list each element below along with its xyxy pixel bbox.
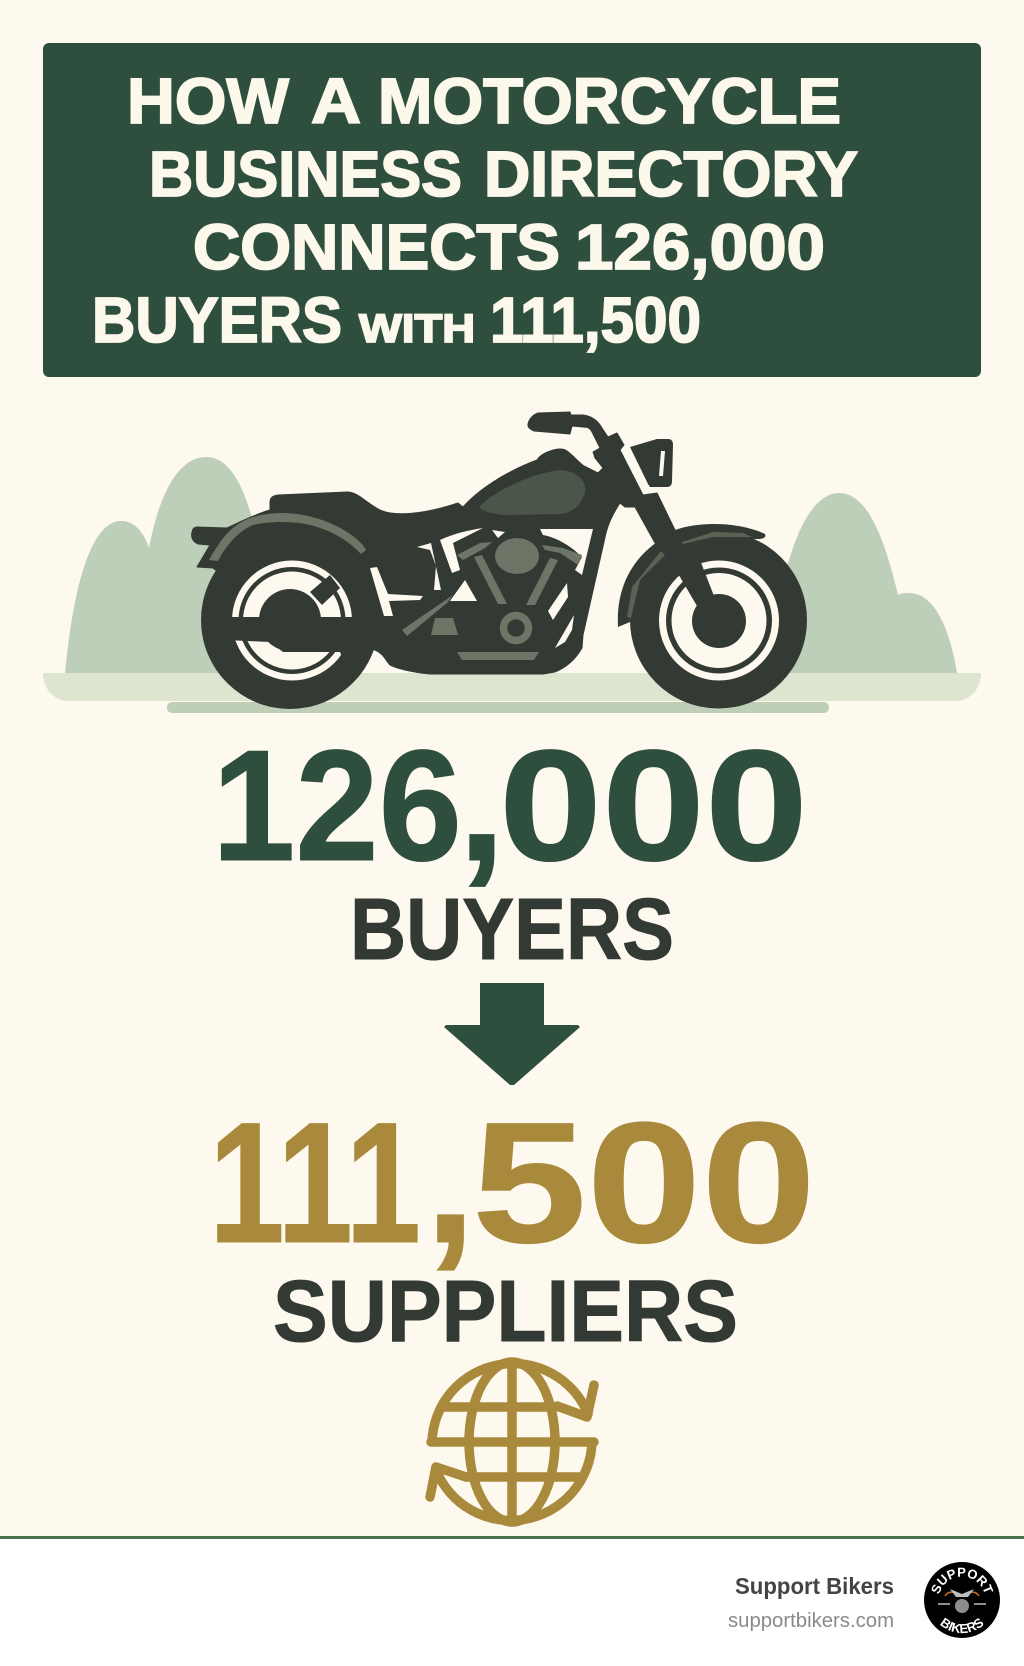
footer divider <box>0 1536 1024 1539</box>
frame and engine cut-outs <box>370 528 593 648</box>
suppliers number: 500 <box>472 1087 816 1279</box>
brand name: Support Bikers <box>735 1573 894 1599</box>
motorcycle body silhouette <box>192 412 712 674</box>
title panel <box>43 43 981 377</box>
brand url: supportbikers.com <box>728 1610 894 1632</box>
logo <box>924 1562 1000 1638</box>
hills right <box>770 493 957 673</box>
buyers number: 000 <box>499 718 808 894</box>
title heading: HOW <box>127 65 290 137</box>
front fender <box>618 524 765 627</box>
title heading: BUYERS <box>92 284 342 356</box>
fuel tank <box>479 470 585 515</box>
footer <box>0 1536 1024 1666</box>
suppliers number: 111 <box>209 1087 421 1279</box>
logo: SUPPORT <box>932 1568 994 1594</box>
ground shadow <box>167 702 829 713</box>
headlight slit <box>659 451 665 476</box>
rear wheel <box>201 531 379 709</box>
ground band <box>43 673 981 701</box>
title heading: MOTORCYCLE <box>378 65 841 137</box>
front wheel <box>630 532 807 708</box>
title heading: WITH <box>359 307 475 351</box>
title heading: DIRECTORY <box>484 138 858 210</box>
title heading: BUSINESS <box>149 138 462 210</box>
title heading: A <box>311 65 361 137</box>
hills left <box>65 457 300 673</box>
front fender stripes <box>627 532 752 618</box>
icon: globe with exchange arrows <box>430 1362 594 1522</box>
buyers number <box>212 707 808 897</box>
buyers label: BUYERS <box>350 881 674 978</box>
title heading <box>92 65 858 356</box>
suppliers label: SUPPLIERS <box>273 1263 738 1360</box>
title heading: 111,500 <box>490 284 701 356</box>
buyers number: 126 <box>212 718 462 894</box>
suppliers number: , <box>425 1077 476 1281</box>
buyers number: , <box>458 707 505 897</box>
rear fender stripe <box>209 513 366 561</box>
title panel background <box>43 43 981 377</box>
title heading: CONNECTS <box>193 211 560 283</box>
headlight <box>630 439 673 487</box>
arrow down <box>444 983 580 1085</box>
engine parts <box>402 538 582 660</box>
title heading: 126,000 <box>575 211 825 283</box>
motorcycle illustration <box>43 412 981 713</box>
suppliers number <box>209 1077 816 1281</box>
logo: BIKERS <box>940 1618 984 1634</box>
footer background <box>0 1537 1024 1666</box>
